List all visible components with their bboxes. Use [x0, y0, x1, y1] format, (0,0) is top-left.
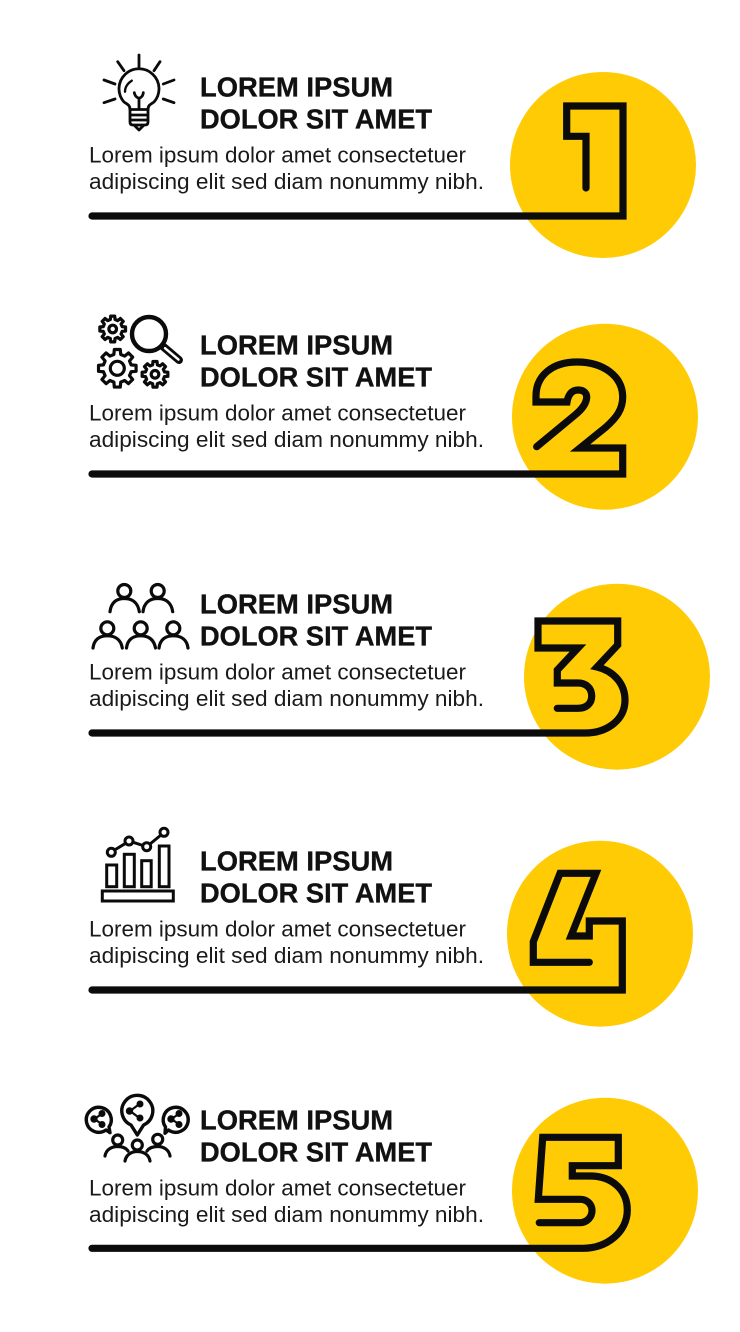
circle 3	[524, 584, 710, 770]
body text 3: adipiscing elit sed diam nonummy nibh.	[89, 686, 484, 711]
heading 1: DOLOR SIT AMET	[200, 103, 432, 134]
gear large	[99, 350, 136, 387]
speech bubbles	[86, 1095, 188, 1135]
trend line	[107, 828, 168, 856]
share symbols	[91, 1102, 181, 1127]
gear small bottom	[142, 361, 168, 387]
magnifier	[132, 317, 179, 360]
number 2 with underline	[92, 362, 623, 474]
number 4 with underline	[92, 873, 622, 990]
body text 5: adipiscing elit sed diam nonummy nibh.	[89, 1202, 484, 1227]
heading 1: LOREM IPSUM	[200, 72, 393, 103]
gear hubs	[109, 325, 159, 378]
heading 3: DOLOR SIT AMET	[200, 620, 432, 651]
heading 5: DOLOR SIT AMET	[200, 1136, 432, 1167]
gear small top	[100, 316, 126, 342]
icon: light bulb	[104, 55, 174, 130]
body text 1: adipiscing elit sed diam nonummy nibh.	[89, 169, 484, 194]
number 1 with underline	[92, 106, 623, 216]
icon: team of people	[93, 584, 188, 648]
number 3 with underline	[92, 621, 625, 733]
circle 5	[512, 1098, 698, 1284]
step 4	[89, 828, 693, 1027]
number 5 with underline	[92, 1137, 627, 1248]
icon: gears and magnifier	[99, 316, 179, 387]
body text 2: Lorem ipsum dolor amet consectetuer	[89, 400, 466, 425]
group of people	[105, 1134, 170, 1161]
step 1	[89, 55, 696, 258]
heading 2: DOLOR SIT AMET	[200, 361, 432, 392]
heading 5: LOREM IPSUM	[200, 1105, 393, 1136]
step 5	[86, 1095, 698, 1284]
circle 4	[507, 841, 693, 1027]
heading 4: LOREM IPSUM	[200, 846, 393, 877]
circle 1	[510, 72, 696, 258]
heading 2: LOREM IPSUM	[200, 330, 393, 361]
icon: bar chart with trend line	[102, 828, 173, 901]
icon: people sharing	[86, 1095, 188, 1161]
body text 3: Lorem ipsum dolor amet consectetuer	[89, 659, 466, 684]
body text 2: adipiscing elit sed diam nonummy nibh.	[89, 427, 484, 452]
bars	[102, 846, 173, 901]
heading 3: LOREM IPSUM	[200, 589, 393, 620]
body text 4: Lorem ipsum dolor amet consectetuer	[89, 916, 466, 941]
body text 4: adipiscing elit sed diam nonummy nibh.	[89, 943, 484, 968]
circle 2	[512, 324, 698, 510]
body text 5: Lorem ipsum dolor amet consectetuer	[89, 1175, 466, 1200]
step 2	[89, 316, 698, 510]
body text 1: Lorem ipsum dolor amet consectetuer	[89, 142, 466, 167]
step 3	[89, 584, 710, 770]
heading 4: DOLOR SIT AMET	[200, 877, 432, 908]
